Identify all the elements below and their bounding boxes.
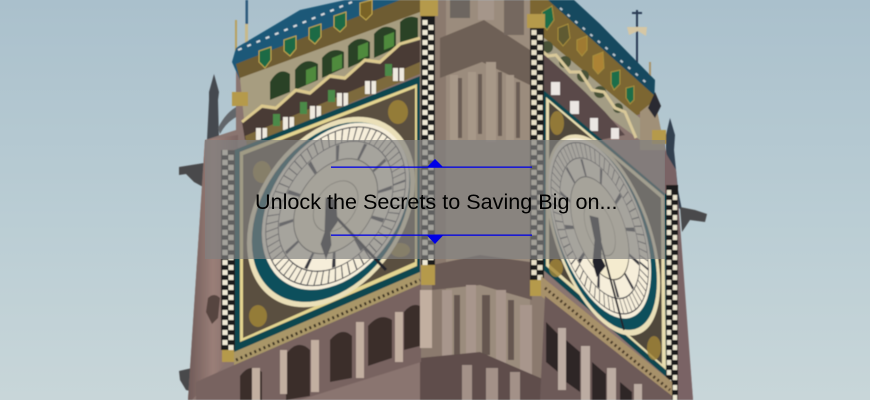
title: Unlock the Secrets to Saving Big on... (255, 189, 618, 214)
checker columns (225, 0, 675, 400)
right clock hands (590, 216, 624, 330)
left clock frame (234, 76, 420, 356)
right belfry (530, 0, 665, 150)
gargoyles (179, 163, 707, 392)
right spire (664, 118, 682, 210)
right arcade (540, 296, 672, 400)
left side stone pier (188, 135, 238, 400)
right clock face (546, 98, 660, 372)
central corner tower (420, 0, 545, 400)
left gold inscription band (234, 272, 420, 366)
left finial (235, 0, 248, 60)
left arcade (196, 284, 432, 400)
left clock hands (321, 198, 386, 270)
translucent grey title overlay (205, 140, 665, 259)
gold capitals on columns (222, 0, 666, 362)
right gold inscription band (541, 276, 672, 396)
tower body (188, 0, 693, 400)
left belfry (232, 0, 420, 146)
right clock frame (541, 88, 672, 382)
left pier carving (206, 295, 220, 324)
right finial with gold cross (627, 10, 651, 94)
right side stone pier (664, 150, 693, 400)
left clock face (247, 91, 415, 333)
left spire (207, 74, 238, 140)
